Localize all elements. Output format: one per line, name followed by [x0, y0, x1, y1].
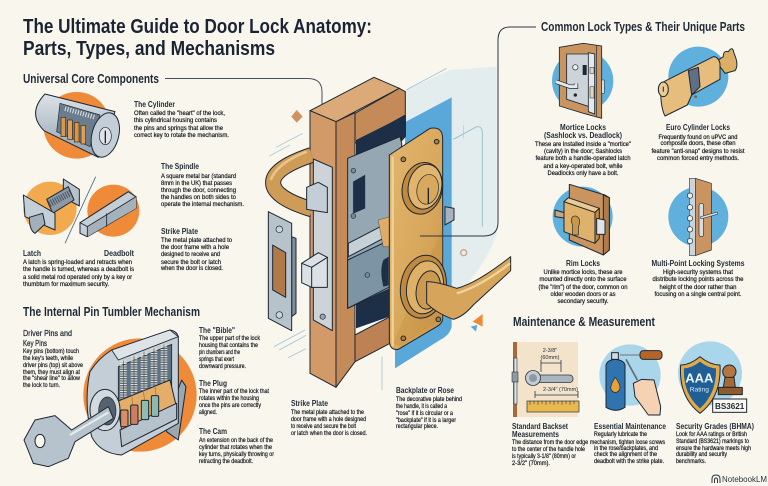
icon: security rating shield: BS3621: [715, 401, 745, 411]
text: latch and deadbolt: thumbturn for maximum security.: [23, 282, 109, 288]
text: backplate or rose: "rose" if it is circular or a: [396, 411, 454, 417]
text: strike plate (center): [291, 399, 367, 437]
text: mortice locks: Mortice Locks: [560, 123, 606, 132]
text: essential maintenance: in the rose/backplates, and: [594, 446, 658, 452]
text: strike plate (center): or latch when the door is closed.: [291, 431, 367, 437]
text: mortice locks: [535, 123, 631, 177]
text: strike plate (center): Strike Plate: [291, 399, 328, 408]
text: security grades: benchmarks.: [676, 459, 706, 465]
text: strike plate (center): to receive and secure the bolt: [291, 424, 356, 430]
connector: types to door: [420, 27, 536, 236]
text: backplate or rose: rectangular piece.: [396, 424, 438, 430]
text: backplate or rose: Backplate or Rose: [396, 386, 454, 395]
text: the cylinder: this cylindrical housing contains: [134, 118, 217, 124]
text: the bible: downward pressure.: [199, 364, 246, 370]
text: rim locks: secondary security.: [558, 299, 609, 305]
text: standard backset measurements: The distance from the door edge: [512, 440, 589, 446]
text: the spindle: the handles on both sides to: [161, 195, 237, 201]
text: driver pins and key pins: Key pins (bottom) touch: [23, 349, 79, 355]
text: rim locks: mounted directly onto the surface: [540, 277, 627, 283]
text: strike plate: Strike Plate: [161, 227, 198, 236]
title: [23, 16, 372, 60]
icon: backset measurement: (60mm): [541, 355, 560, 361]
text: rim locks: (the "rim") of the door, common on: [538, 285, 628, 291]
text: essential maintenance: deadbolt with the strike plate.: [594, 459, 664, 465]
text: the plug: [199, 379, 269, 416]
text: mortice locks: (Sashlock vs. Deadlock): [544, 131, 622, 140]
text: the bible: housing that contains the: [199, 343, 259, 349]
door top and edge: [310, 77, 405, 387]
text: multi-point locking systems: distribute locking points across the: [652, 277, 744, 283]
icon: rim lock: [553, 184, 613, 255]
text: the cam: An extension on the back of the: [199, 438, 274, 444]
text: strike plate (center): door frame with a hole designed: [291, 417, 366, 423]
text: security grades: Security Grades (BHMA): [676, 422, 754, 431]
text: essential maintenance: Essential Maintenance: [594, 422, 666, 431]
text: standard backset measurements: Standard Backset: [512, 422, 568, 431]
text: euro cylinder locks: common forced entry methods.: [657, 156, 739, 162]
text: mortice locks: Deadlocks only have a bolt.: [548, 171, 619, 177]
heading: pin tumbler mechanism: The Internal Pin Tumbler Mechanism: [23, 305, 200, 319]
text: driver pins and key pins: [23, 328, 84, 389]
text: latch and deadbolt: a solid metal rod operated only by a key or: [23, 275, 132, 281]
text: driver pins and key pins: the "shear line" to allow: [23, 376, 81, 382]
text: the bible: [199, 326, 261, 370]
text: standard backset measurements: Measurements: [512, 430, 559, 439]
title: The Ultimate Guide to Door Lock Anatomy:: [23, 16, 372, 38]
heading: maintenance and measurement: Maintenance & Measurement: [513, 315, 656, 329]
text: backplate or rose: "backplate" if it is a larger: [396, 418, 456, 424]
mortice case: [348, 137, 402, 308]
text: essential maintenance: Regularly lubricate the: [594, 432, 648, 438]
text: the bible: springs that exert: [199, 357, 234, 363]
text: euro cylinder locks: Euro Cylinder Locks: [666, 123, 730, 132]
forend strip and bolts: [302, 159, 332, 331]
text: driver pins and key pins: Key Pins: [23, 338, 47, 348]
text: multi-point locking systems: focusing on a single central point.: [654, 292, 742, 298]
text: the bible: The upper part of the lock: [199, 336, 261, 342]
text: the cam: cylinder that rotates when the: [199, 445, 273, 451]
text: the cylinder: The Cylinder: [134, 100, 175, 109]
text: the plug: The Plug: [199, 379, 227, 388]
text: the plug: The inner part of the lock that: [199, 389, 269, 395]
strike plate: [268, 212, 296, 331]
icon: multi-point lock: [668, 178, 728, 256]
text: backplate or rose: The decorative plate behind: [396, 397, 462, 403]
text: the cam: The Cam: [199, 427, 227, 436]
text: the bible: The "Bible": [199, 326, 235, 335]
text: multi-point locking systems: [652, 259, 745, 298]
text: standard backset measurements: to the center of the handle hole: [512, 447, 586, 453]
text: euro cylinder locks: [652, 123, 745, 162]
text: the spindle: A square metal bar (standard: [161, 174, 236, 180]
illustration: pin tumbler cutaway and key: [24, 330, 197, 467]
text: the bible: pin chambers and the: [199, 350, 240, 356]
icon: mortice lock: [552, 43, 613, 118]
text: backplate or rose: the handle, it is called a: [396, 404, 448, 410]
text: latch and deadbolt: A latch is spring-loaded and retracts when: [23, 260, 132, 266]
text: latch and deadbolt: Deadbolt: [104, 249, 134, 258]
icon: backset measurement: 2-3/8": [543, 348, 557, 354]
text: essential maintenance: [590, 422, 666, 465]
text: standard backset measurements: is typically 3-1/8" (80mm) or: [512, 454, 576, 460]
text: mortice locks: and a key-operated bolt, while: [544, 164, 623, 170]
text: essential maintenance: mechanism, tighten loose screws: [590, 440, 665, 446]
text: mortice locks: (cavity) in the door; Sashlocks: [544, 149, 622, 155]
text: multi-point locking systems: height of the door rather than: [660, 285, 736, 291]
text: strike plate: [160, 227, 233, 272]
text: security grades: [676, 422, 754, 465]
text: driver pins and key pins: the key's teeth, while: [23, 356, 74, 362]
text: driver pins and key pins: driver pins (top) sit above: [23, 363, 84, 369]
text: driver pins and key pins: Driver Pins and: [23, 328, 72, 338]
text: backplate or rose: [396, 386, 462, 430]
text: the spindle: operate the internal mechanism.: [161, 202, 244, 208]
text: standard backset measurements: [512, 422, 589, 467]
text: strike plate: the door frame with a hole: [161, 245, 230, 251]
text: essential maintenance: check the alignment of the: [594, 452, 658, 458]
text: the plug: aligned.: [199, 410, 217, 416]
text: the spindle: [161, 162, 244, 208]
text: euro cylinder locks: Frequently found on uPVC and: [658, 135, 738, 141]
icon: backset measurement: [512, 342, 579, 417]
text: strike plate: when the door is closed.: [160, 266, 223, 272]
icon: cylinder: [36, 92, 124, 160]
text: security grades: durability and security: [676, 452, 727, 458]
text: the cylinder: the pins and springs that allow the: [134, 126, 224, 132]
text: security grades: ensure the hardware meets high: [676, 446, 751, 452]
text: latch and deadbolt: the handle is turned, whereas a deadbolt is: [23, 267, 134, 273]
heading: universal core components: Universal Core Components: [23, 72, 159, 86]
text: the plug: once the pins are correctly: [199, 403, 261, 409]
text: standard backset measurements: 2-3/2" (70mm).: [512, 461, 550, 467]
icon: latch and deadbolt: [23, 177, 139, 243]
text: strike plate: The metal plate attached to: [161, 238, 233, 244]
text: driver pins and key pins: them, they must align at: [23, 370, 80, 376]
cylinder rose: [397, 159, 447, 218]
illustration: exploded door lock: [268, 67, 511, 390]
text: mortice locks: These are installed inside a "mortice": [535, 142, 631, 148]
text: euro cylinder locks: composite doors, these often: [660, 141, 736, 147]
text: the cam: [199, 427, 274, 465]
text: the cam: retracting the deadbolt.: [199, 459, 253, 465]
icon: essential maintenance: [599, 344, 662, 415]
title: Parts, Types, and Mechanisms: [23, 38, 275, 60]
text: strike plate (center): The metal plate attached to the: [291, 410, 365, 416]
text: latch and deadbolt: [23, 249, 134, 288]
text: mortice locks: feature both a handle-operated latch: [536, 156, 630, 162]
text: rim locks: Unlike mortice locks, these are: [544, 270, 623, 276]
text: the cylinder: Often called the "heart" of the lock,: [134, 111, 225, 117]
icon: security rating shield: [678, 341, 747, 413]
text: rim locks: [538, 259, 628, 305]
text: the spindle: 8mm in the UK) that passes: [161, 181, 232, 187]
text: the spindle: The Spindle: [161, 162, 199, 171]
text: multi-point locking systems: Multi-Point Locking Systems: [652, 259, 745, 268]
text: the plug: rotates within the housing: [199, 396, 259, 402]
text: rim locks: Rim Locks: [566, 259, 600, 268]
text: strike plate: secure the bolt or latch: [161, 260, 221, 266]
text: latch and deadbolt: Latch: [23, 249, 41, 258]
text: the cam: key turns, physically throwing or: [199, 452, 274, 458]
text: strike plate: designed to receive and: [161, 252, 220, 258]
inner handle: [273, 155, 312, 209]
text: driver pins and key pins: the lock to turn.: [23, 383, 60, 389]
handle rose and lever: [396, 252, 511, 322]
text: rim locks: older wooden doors or as: [550, 292, 616, 298]
text: euro cylinder locks: feature "anti-snap" designs to resist: [652, 149, 745, 155]
text: the cylinder: correct key to rotate the mechanism.: [134, 133, 229, 139]
icon: euro cylinder: [658, 47, 737, 116]
icon: backset measurement: 2-3/4" (70mm): [543, 387, 578, 393]
icon: security rating shield: AAA: [685, 370, 714, 385]
text: security grades: Standard (BS3621) markings to: [676, 439, 750, 445]
decorative accents: [291, 110, 303, 123]
icon: security rating shield: Rating: [690, 387, 709, 394]
text: security grades: Look for AAA ratings or British: [676, 432, 747, 438]
text: multi-point locking systems: High-security systems that: [663, 270, 733, 276]
text: the cylinder: [134, 100, 229, 139]
text: the spindle: through the door, connecting: [161, 188, 236, 194]
backplate: [389, 128, 443, 349]
connector: components to door: [165, 78, 322, 135]
